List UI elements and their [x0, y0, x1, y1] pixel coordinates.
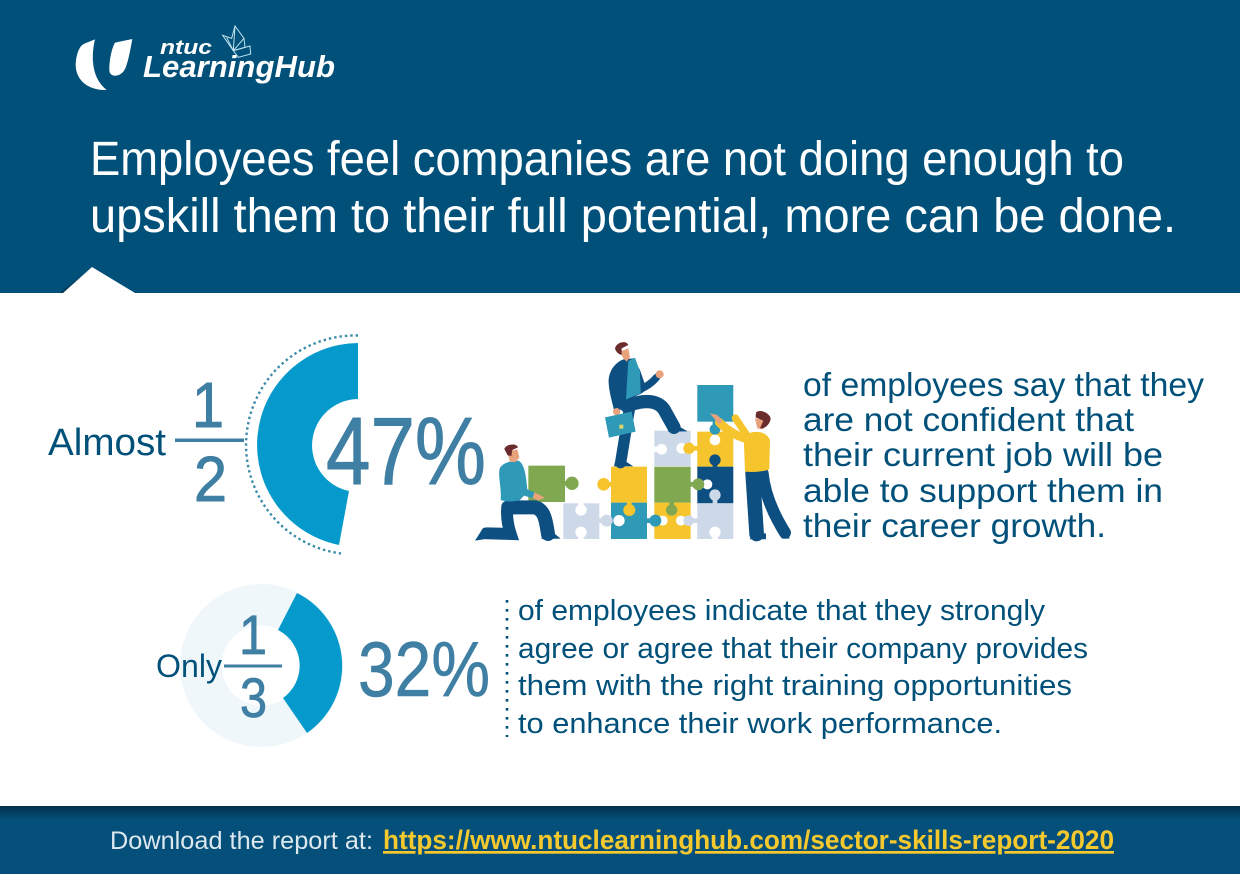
illustration: team building puzzle	[475, 342, 789, 541]
paragraph: training opportunities: to enhance their work performance.	[518, 708, 1002, 740]
paragraph: training opportunities: of employees indicate that they strongly	[518, 595, 1046, 627]
person: kneeling man	[475, 444, 561, 541]
fraction: one third: 3	[240, 666, 267, 729]
stat: 47%: 47%	[326, 398, 486, 505]
donut chart background	[180, 584, 343, 747]
paragraph: career growth: their current job will be	[803, 436, 1163, 473]
donut chart: 47%	[257, 343, 358, 545]
fraction: one half: 1	[192, 369, 224, 441]
footer link: https://www.ntuclearninghub.com/sector-skills-report-2020	[383, 825, 1114, 855]
puzzle pieces	[528, 385, 733, 539]
paragraph: training opportunities: agree or agree that their company provides	[518, 633, 1088, 665]
header pointer	[60, 267, 135, 293]
person: climbing man	[605, 342, 688, 466]
logo wordmark small: ntuc	[160, 37, 212, 59]
paragraph: career growth	[803, 366, 1204, 544]
stat: 32%: 32%	[358, 625, 490, 713]
footer text: Download the report at:	[110, 827, 373, 855]
paragraph: career growth: are not confident that	[803, 401, 1134, 438]
paragraph: career growth: of employees say that they	[803, 366, 1204, 403]
dotted arc	[246, 335, 358, 554]
icon: U mark	[76, 39, 132, 90]
panel: only a third	[156, 584, 490, 747]
footer bar	[0, 806, 1240, 874]
fraction: one half: 2	[194, 443, 227, 515]
dotted divider	[506, 600, 508, 737]
title	[90, 133, 1176, 243]
paragraph: career growth: their career growth.	[803, 507, 1106, 544]
header panel	[0, 0, 1240, 293]
fraction: one third: 1	[239, 603, 267, 666]
title: Employees feel companies are not doing enough to	[90, 133, 1124, 186]
title: upskill them to their full potential, more can be done.	[90, 190, 1176, 243]
panel: almost half	[48, 335, 486, 554]
fraction: one half	[175, 369, 244, 515]
icon: butterfly	[223, 26, 251, 57]
donut chart: 32%	[278, 593, 342, 733]
label: Only: Only	[156, 648, 222, 684]
paragraph: training opportunities	[518, 595, 1088, 740]
fraction: one third	[224, 603, 282, 729]
paragraph: training opportunities: them with the right training opportunities	[518, 670, 1072, 702]
paragraph: career growth: able to support them in	[803, 472, 1163, 509]
person: man placing piece	[710, 411, 789, 539]
logo: NTUC LearningHub	[76, 26, 335, 90]
label: Almost: Almost	[48, 422, 166, 464]
logo wordmark large: LearningHub	[143, 49, 335, 84]
